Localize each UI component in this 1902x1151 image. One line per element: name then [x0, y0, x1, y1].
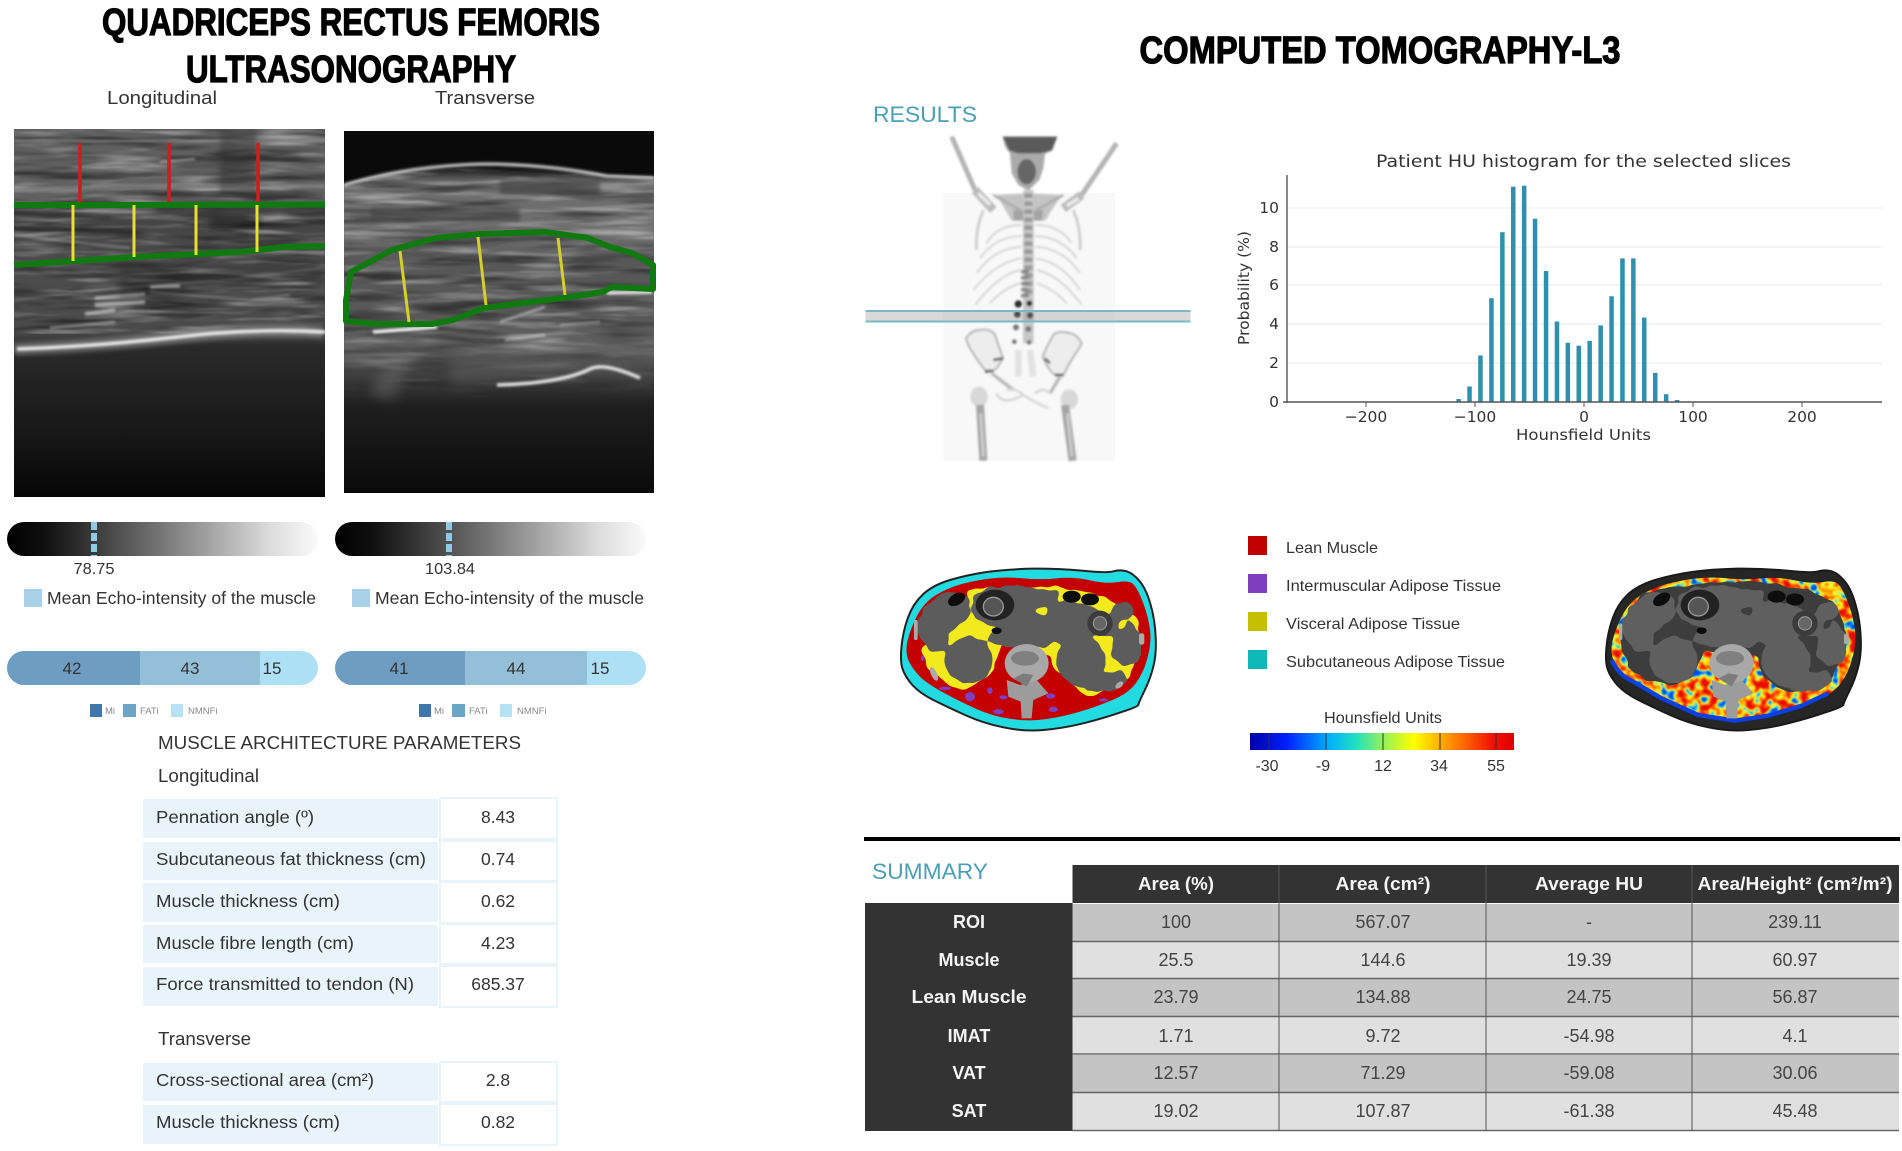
table values: - — [1586, 912, 1592, 932]
chart: patient HU histogram: −100 — [1454, 408, 1496, 426]
table values: 4.1 — [1782, 1026, 1808, 1046]
table: transverse parameters — [143, 1062, 557, 1145]
echo-intensity bar: transverse — [335, 522, 646, 578]
table: transverse parameters: Muscle thickness (cm) — [156, 1112, 340, 1132]
colour scale: Hounsfield units: 34 — [1430, 758, 1448, 775]
legend: tissue classes — [1248, 536, 1505, 671]
row labels: ROI — [953, 912, 985, 932]
table values: 144.6 — [1360, 950, 1406, 970]
table values: 107.87 — [1355, 1101, 1411, 1121]
colour scale: Hounsfield units: 55 — [1487, 758, 1505, 775]
colour scale: Hounsfield units — [1250, 710, 1514, 775]
table: longitudinal parameters: Force transmitted to tendon (N) — [156, 974, 414, 994]
table: transverse parameters: Cross-sectional area (cm²) — [156, 1070, 374, 1090]
chart: patient HU histogram: Hounsfield Units — [1516, 426, 1651, 444]
image: longitudinal ultrasound — [14, 129, 325, 497]
legend: tissue classes: Intermuscular Adipose Tissue — [1286, 578, 1501, 595]
table: longitudinal parameters: 4.23 — [481, 933, 515, 953]
row labels: Lean Muscle — [912, 987, 1026, 1007]
echo-intensity bar: transverse: 103.84 — [425, 561, 475, 578]
mini legend left — [90, 704, 218, 717]
echo-intensity bar: longitudinal — [7, 522, 318, 578]
stacked bar: transverse composition: 15 — [591, 659, 609, 678]
title: quadriceps rectus femoris ultrasonography: QUADRICEPS RECTUS FEMORIS — [102, 2, 600, 44]
table values: 567.07 — [1355, 912, 1411, 932]
label: transverse: Transverse — [435, 88, 535, 108]
table header: Area/Height² (cm²/m²) — [1698, 874, 1893, 894]
table header: Average HU — [1535, 874, 1643, 894]
table values: 24.75 — [1566, 987, 1612, 1007]
image: whole-body bone projection with L3 slice band — [866, 137, 1190, 461]
divider rule — [864, 837, 1900, 841]
mini legend left: NMNFi — [188, 706, 218, 717]
stacked bar: longitudinal composition: 15 — [263, 659, 281, 678]
table values: 9.72 — [1365, 1026, 1401, 1046]
row labels: IMAT — [948, 1026, 990, 1046]
histogram bars — [1456, 186, 1679, 402]
yellow longitudinal markers — [73, 205, 257, 261]
chart: patient HU histogram: 0 — [1579, 408, 1589, 426]
chart: patient HU histogram: 4 — [1269, 315, 1279, 333]
label: longitudinal: Longitudinal — [107, 88, 217, 108]
table values — [1153, 912, 1822, 1121]
mini legend left: Mi — [105, 706, 115, 717]
table: longitudinal parameters: 8.43 — [481, 807, 515, 827]
table: transverse parameters: 2.8 — [486, 1070, 510, 1090]
chart: patient HU histogram: 8 — [1269, 238, 1279, 256]
table: longitudinal parameters: Pennation angle (º) — [156, 807, 314, 827]
legend: tissue classes: Visceral Adipose Tissue — [1286, 616, 1460, 633]
table values: -59.08 — [1563, 1063, 1615, 1083]
chart: patient HU histogram: 6 — [1269, 276, 1279, 294]
table values: 30.06 — [1772, 1063, 1818, 1083]
chart: patient HU histogram: −200 — [1345, 408, 1387, 426]
table: longitudinal parameters: Muscle thickness (cm) — [156, 891, 340, 911]
table values: 134.88 — [1355, 987, 1411, 1007]
table: longitudinal parameters: 0.62 — [481, 891, 515, 911]
table: longitudinal parameters: 685.37 — [471, 974, 525, 994]
table values: 1.71 — [1158, 1026, 1194, 1046]
table values: 60.97 — [1772, 950, 1818, 970]
table values: -61.38 — [1563, 1101, 1615, 1121]
subheading: transverse: Transverse — [158, 1029, 251, 1049]
table values: 19.39 — [1566, 950, 1612, 970]
row labels: VAT — [952, 1063, 986, 1083]
stacked bar: transverse composition — [335, 651, 646, 685]
table: longitudinal parameters: 0.74 — [481, 849, 515, 869]
stacked bar: longitudinal composition — [7, 651, 318, 685]
stacked bar: longitudinal composition: 42 — [63, 659, 81, 678]
table: longitudinal parameters: Muscle fibre length (cm) — [156, 933, 354, 953]
row labels — [912, 912, 1026, 1121]
table header — [1138, 874, 1893, 894]
chart: patient HU histogram: 100 — [1678, 408, 1708, 426]
legend: mean echo-intensity left: Mean Echo-intensity of the muscle — [47, 588, 316, 608]
subheading: longitudinal: Longitudinal — [158, 766, 259, 786]
title: quadriceps rectus femoris ultrasonography: ULTRASONOGRAPHY — [186, 49, 516, 91]
green longitudinal muscle borders — [14, 204, 325, 265]
chart: patient HU histogram — [1235, 152, 1882, 444]
mini legend right: Mi — [434, 706, 444, 717]
table values: 239.11 — [1768, 912, 1822, 932]
table: transverse parameters: 0.82 — [481, 1112, 515, 1132]
stacked bar: longitudinal composition: 43 — [181, 659, 199, 678]
chart: patient HU histogram: 2 — [1269, 354, 1279, 372]
table values: 25.5 — [1158, 950, 1194, 970]
mini legend right — [419, 704, 547, 717]
table values: 12.57 — [1153, 1063, 1199, 1083]
chart: patient HU histogram: Patient HU histogram for the selected slices — [1376, 152, 1791, 172]
table header: Area (cm²) — [1336, 874, 1430, 894]
row labels: Muscle — [938, 950, 1000, 970]
table values: -54.98 — [1563, 1026, 1615, 1046]
table: CT summary — [865, 865, 1899, 1131]
green transverse muscle outline — [346, 232, 653, 324]
echo-intensity bar: longitudinal: 78.75 — [74, 561, 115, 578]
table values: 23.79 — [1153, 987, 1199, 1007]
stacked bar: transverse composition: 41 — [390, 659, 408, 678]
yellow transverse markers — [400, 237, 565, 322]
colour scale: Hounsfield units: -9 — [1316, 758, 1330, 775]
colour scale: Hounsfield units: -30 — [1255, 758, 1279, 775]
mini legend right: FATi — [469, 706, 487, 717]
table values: 19.02 — [1153, 1101, 1199, 1121]
table values: 56.87 — [1772, 987, 1818, 1007]
stacked bar: transverse composition: 44 — [507, 659, 525, 678]
table values: 71.29 — [1360, 1063, 1406, 1083]
table header: Area (%) — [1138, 874, 1214, 894]
mini legend left: FATi — [140, 706, 158, 717]
chart: patient HU histogram: Probability (%) — [1235, 231, 1253, 345]
mini legend right: NMNFi — [517, 706, 547, 717]
image: segmented CT slice — [901, 569, 1156, 730]
colour scale: Hounsfield units: 12 — [1374, 758, 1392, 775]
chart: patient HU histogram: 10 — [1259, 199, 1279, 217]
legend: tissue classes: Subcutaneous Adipose Tissue — [1286, 654, 1505, 671]
table: longitudinal parameters — [143, 798, 557, 1007]
chart: patient HU histogram: 200 — [1787, 408, 1817, 426]
heading: summary: SUMMARY — [872, 859, 988, 884]
legend: tissue classes: Lean Muscle — [1286, 540, 1378, 557]
row labels: SAT — [952, 1101, 986, 1121]
heading: results: RESULTS — [873, 102, 977, 127]
table values: 45.48 — [1772, 1101, 1818, 1121]
title: computed tomography L3: COMPUTED TOMOGRAPHY-L3 — [1140, 30, 1620, 72]
image: transverse ultrasound — [344, 131, 654, 493]
red thickness markers — [80, 143, 258, 205]
table values: 100 — [1161, 912, 1191, 932]
title: quadriceps rectus femoris ultrasonography — [102, 2, 600, 91]
chart: patient HU histogram: 0 — [1269, 393, 1279, 411]
image: HU heat-map CT slice — [1605, 565, 1870, 735]
table: longitudinal parameters: Subcutaneous fat thickness (cm) — [156, 849, 426, 869]
colour scale: Hounsfield units: Hounsfield Units — [1324, 710, 1442, 727]
heading: muscle architecture parameters: MUSCLE ARCHITECTURE PARAMETERS — [158, 732, 521, 753]
legend: mean echo-intensity right: Mean Echo-intensity of the muscle — [375, 588, 644, 608]
